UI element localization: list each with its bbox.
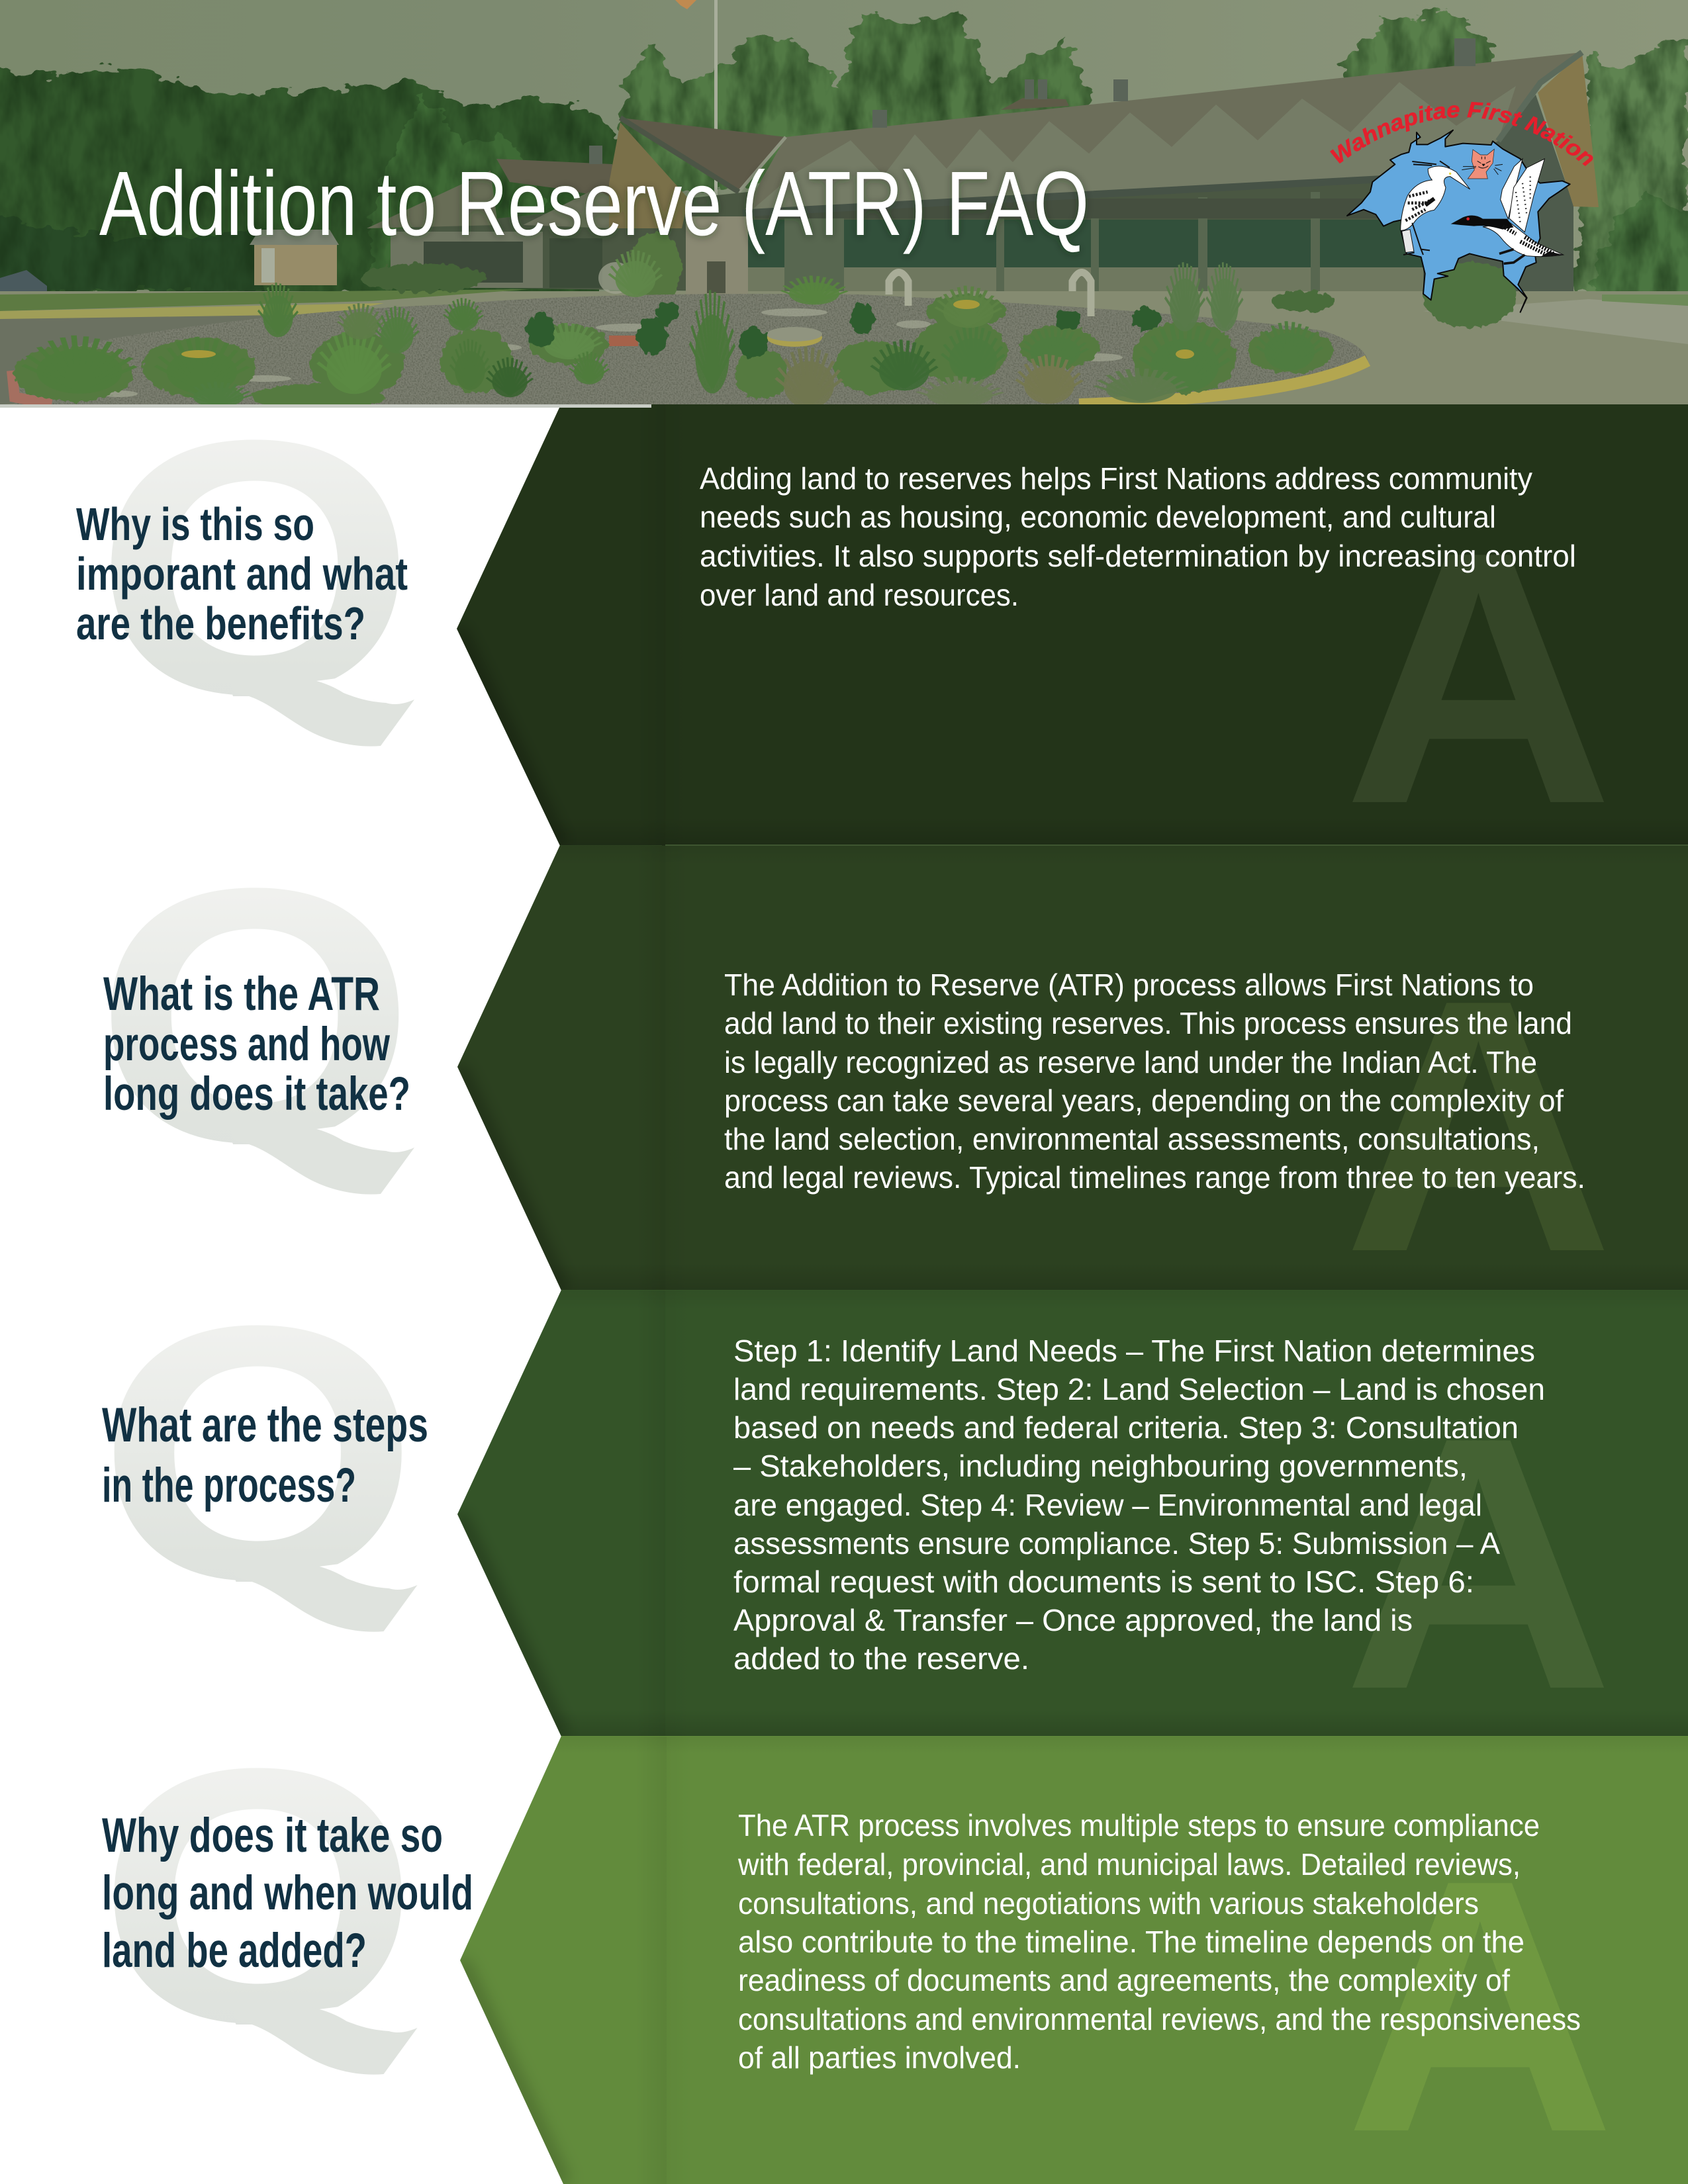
panel 2 answer: and legal reviews. Typical timelines range from three to ten years. bbox=[724, 1160, 1585, 1195]
panel 2 answer: add land to their existing reserves. This process ensures the land bbox=[724, 1006, 1572, 1040]
panel 4 answer: of all parties involved. bbox=[738, 2040, 1021, 2075]
panel 3 answer: formal request with documents is sent to ISC. Step 6: bbox=[733, 1565, 1474, 1599]
flower patches bbox=[181, 300, 1194, 359]
logo loon bbox=[1451, 159, 1564, 263]
panel 3 answer: are engaged. Step 4: Review – Environmental and legal bbox=[733, 1488, 1482, 1522]
panel 3 answer: based on needs and federal criteria. Step 3: Consultation bbox=[733, 1410, 1519, 1445]
monument bbox=[686, 216, 748, 291]
panel 1 question bbox=[76, 498, 408, 649]
panel 4 question: Why does it take so bbox=[102, 1809, 443, 1862]
panel 2 watermark A: A bbox=[1343, 925, 1614, 1326]
logo lake shape bbox=[1347, 130, 1570, 312]
panel 4 question: land be added? bbox=[102, 1924, 367, 1978]
panel 3: steps bbox=[97, 1250, 1688, 1764]
roof vents bbox=[589, 38, 1476, 164]
panel 3 answer: added to the reserve. bbox=[733, 1641, 1029, 1676]
roofs bbox=[367, 171, 498, 228]
panel 1 answer bbox=[700, 461, 1576, 612]
panel 2 answer: the land selection, environmental assessments, consultations, bbox=[724, 1122, 1540, 1156]
title: Addition to Reserve (ATR) FAQ bbox=[99, 153, 1089, 255]
logo: Wahnapitae First Nation: Wahnapitae First Nation bbox=[1330, 102, 1593, 166]
logo name arc text bbox=[1338, 117, 1589, 169]
panel 4 question: long and when would bbox=[102, 1866, 473, 1920]
panel 4 answer bbox=[737, 1808, 1581, 2075]
panel 1 watermark A: A bbox=[1343, 477, 1614, 878]
divider under photo bbox=[0, 404, 651, 408]
flag pole bbox=[714, 0, 718, 199]
panel 1 watermark Q: Q bbox=[95, 365, 416, 770]
panel 3 answer: assessments ensure compliance. Step 5: Submission – A bbox=[733, 1526, 1500, 1561]
panel 3 answer: – Stakeholders, including neighbouring governments, bbox=[733, 1449, 1468, 1483]
round shrubs bbox=[526, 302, 1160, 359]
shed bbox=[254, 243, 337, 285]
panel 3 watermark A: A bbox=[1343, 1363, 1614, 1764]
panel 2 question: What is the ATR bbox=[103, 968, 380, 1021]
panel 4 answer: consultations and environmental reviews, and the responsiveness bbox=[738, 2002, 1581, 2036]
ground, lawn and roads bbox=[0, 291, 1688, 404]
panel 2 answer: is legally recognized as reserve land under the Indian Act. The bbox=[724, 1045, 1537, 1079]
garden foliage patches bbox=[13, 295, 1334, 410]
panel 2 question: process and how bbox=[103, 1019, 391, 1071]
panel 3 answer: Approval & Transfer – Once approved, the land is bbox=[733, 1603, 1413, 1637]
panel 4 answer: The ATR process involves multiple steps to ensure compliance bbox=[738, 1808, 1540, 1843]
panel 3 question: in the process? bbox=[102, 1459, 356, 1512]
panel 1 answer: over land and resources. bbox=[700, 578, 1019, 612]
panel 3 watermark Q: Q bbox=[97, 1250, 419, 1656]
panel 4 watermark Q: Q bbox=[97, 1693, 419, 2099]
panel 4 answer: with federal, provincial, and municipal laws. Detailed reviews, bbox=[737, 1847, 1521, 1882]
panel 2 answer bbox=[724, 968, 1585, 1195]
panel 3 question bbox=[102, 1398, 428, 1512]
panel 4 answer: also contribute to the timeline. The timeline depends on the bbox=[738, 1925, 1524, 1959]
panel 3 answer background bbox=[450, 1290, 1688, 1737]
panel 1 answer background bbox=[450, 404, 1688, 846]
logo heron bbox=[1401, 161, 1470, 255]
panel 2 question bbox=[103, 968, 410, 1120]
panel 1 question: Why is this so bbox=[76, 498, 314, 550]
logo cat bbox=[1462, 149, 1503, 179]
panel 1 answer: activities. It also supports self-determination by increasing control bbox=[700, 539, 1576, 573]
panel 4 question bbox=[102, 1809, 473, 1978]
sculpture pipes bbox=[889, 273, 908, 306]
panel 2 answer: process can take several years, depending on the complexity of bbox=[724, 1083, 1564, 1118]
panel 4: timeline bbox=[97, 1693, 1688, 2184]
panel 4 answer: consultations, and negotiations with various stakeholders bbox=[738, 1886, 1479, 1921]
panel 1 answer: needs such as housing, economic development, and cultural bbox=[700, 500, 1496, 534]
building walls bbox=[396, 183, 1378, 291]
planters bbox=[767, 336, 822, 347]
panel 2 answer: The Addition to Reserve (ATR) process allows First Nations to bbox=[724, 968, 1534, 1002]
panel 3 answer: Step 1: Identify Land Needs – The First Nation determines bbox=[733, 1334, 1535, 1368]
panel 4 answer background bbox=[450, 1736, 1688, 2184]
panel 3 answer bbox=[733, 1334, 1545, 1676]
garden plants bbox=[23, 250, 1323, 408]
panel 3 question: What are the steps bbox=[102, 1398, 428, 1452]
panel 1: benefits bbox=[76, 365, 1688, 878]
panel 2 watermark Q: Q bbox=[95, 813, 416, 1218]
panel 3 answer: land requirements. Step 2: Land Selection – Land is chosen bbox=[733, 1372, 1545, 1406]
header photo: band office and garden bbox=[0, 0, 1688, 410]
garden stones bbox=[101, 262, 1123, 397]
panel 2 question: long does it take? bbox=[103, 1068, 410, 1120]
panel 1 question: are the benefits? bbox=[76, 598, 365, 649]
panel 1 question: imporant and what bbox=[76, 548, 408, 600]
panel 1 answer: Adding land to reserves helps First Nations address community bbox=[700, 461, 1532, 496]
panel 2 answer background bbox=[450, 845, 1688, 1291]
panel 2: ATR process bbox=[95, 813, 1688, 1326]
shrubs behind garden bbox=[361, 232, 1517, 328]
panel 4 answer: readiness of documents and agreements, the complexity of bbox=[738, 1963, 1510, 1997]
logo: Wahnapitae First Nation bbox=[1330, 102, 1593, 313]
garden island bbox=[15, 294, 1368, 404]
